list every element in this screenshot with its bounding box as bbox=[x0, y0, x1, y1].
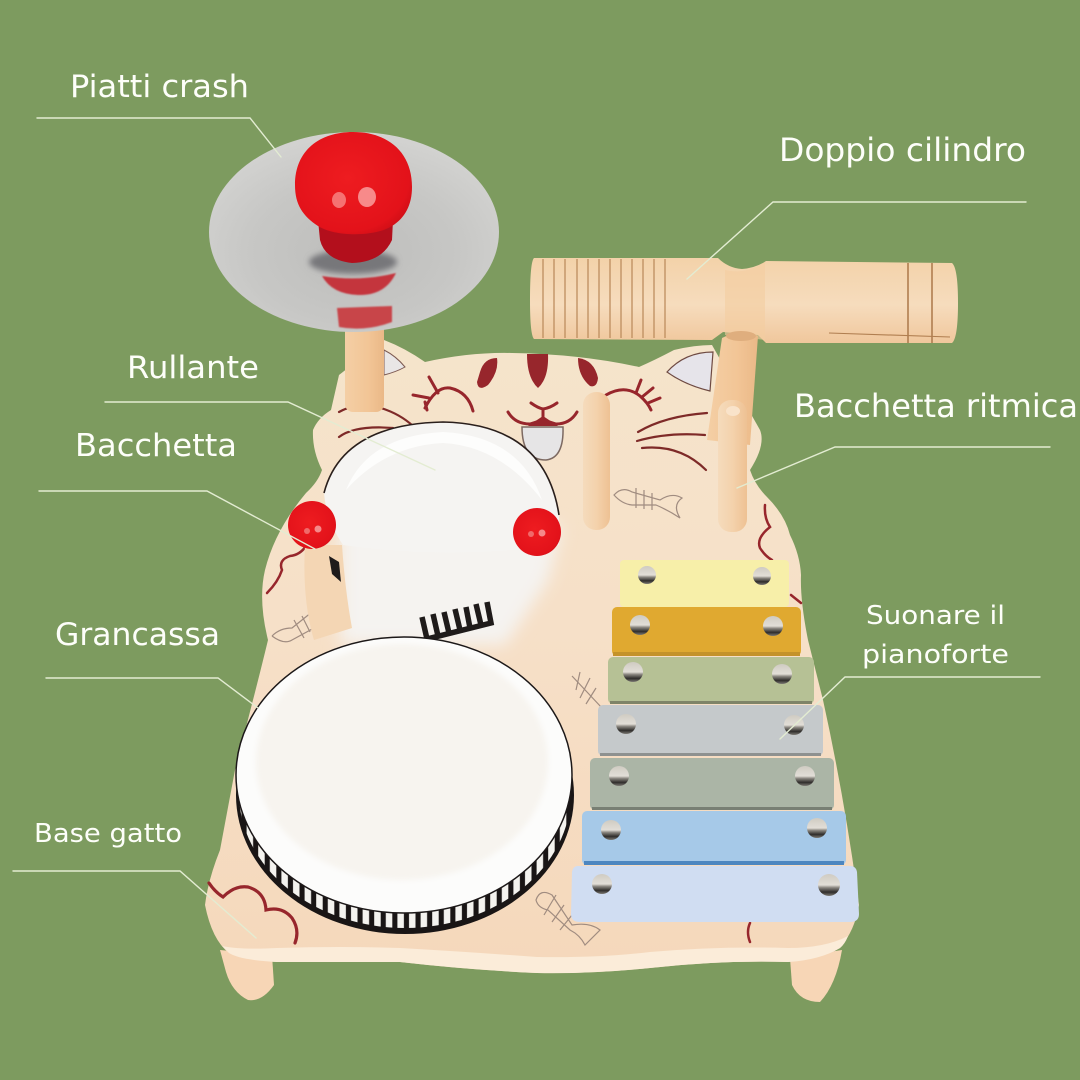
wooden pegs bbox=[583, 392, 747, 532]
line bacchetta bbox=[39, 491, 315, 549]
left stick ball bbox=[288, 501, 336, 549]
board silhouette bbox=[205, 340, 859, 973]
snare outline bbox=[324, 422, 559, 515]
board front edge bbox=[222, 936, 848, 973]
right paw curve bbox=[759, 505, 801, 603]
line suonare bbox=[780, 677, 1040, 739]
neck shading bbox=[725, 262, 765, 340]
drum rim slots bbox=[239, 658, 571, 928]
cylinder body bbox=[530, 258, 958, 343]
label: Suonare il pianoforte: Suonare il bbox=[866, 601, 1005, 631]
xylophone bbox=[571, 560, 859, 922]
label: Bacchetta: Bacchetta bbox=[75, 428, 237, 464]
drum head inner bbox=[256, 644, 548, 880]
line bacchetta ritmica bbox=[737, 447, 1050, 488]
lower left post bbox=[304, 545, 352, 640]
bar 3 sage bbox=[608, 657, 814, 704]
middle peg bbox=[583, 392, 610, 530]
knob stem bbox=[318, 220, 393, 263]
fish bone middle bbox=[572, 672, 602, 708]
cloud foot bbox=[209, 883, 297, 943]
label: Suonare il pianoforte: pianoforte bbox=[862, 640, 1009, 670]
left whiskers bbox=[339, 407, 413, 437]
bar 4 grey bbox=[598, 705, 823, 756]
mouth bbox=[508, 412, 577, 424]
label: Suonare il pianoforte bbox=[862, 601, 1009, 670]
bar 1 yellow bbox=[620, 560, 789, 607]
drum rim black bbox=[236, 656, 574, 934]
fish bone bottom bbox=[536, 892, 600, 945]
right stick ball bbox=[513, 508, 561, 556]
bar 6 blue bbox=[582, 811, 846, 865]
cymbal disc bbox=[209, 132, 499, 332]
fish bone upper bbox=[614, 488, 682, 518]
front right peg bbox=[718, 400, 747, 532]
comb mark bbox=[422, 602, 491, 639]
snare side shadow bbox=[329, 556, 341, 582]
snare lower part bbox=[340, 525, 562, 645]
red drum sticks heads bbox=[288, 501, 561, 556]
grooves bbox=[543, 259, 665, 338]
left ear inner bbox=[384, 350, 405, 375]
line piatti crash bbox=[37, 118, 281, 157]
right leg bbox=[790, 950, 842, 1002]
snare rim highlight bbox=[346, 432, 542, 500]
shadow bbox=[309, 250, 397, 274]
label: Piatti crash: Piatti crash bbox=[70, 69, 249, 105]
label: Rullante: Rullante bbox=[127, 350, 259, 386]
rullante snare drum bbox=[304, 422, 562, 645]
line doppio cilindro bbox=[687, 202, 1026, 279]
callout lines bbox=[13, 118, 1050, 938]
tongue bbox=[522, 427, 563, 460]
label: Doppio cilindro: Doppio cilindro bbox=[779, 131, 1026, 169]
peg hole bbox=[726, 331, 756, 341]
left paw curve bbox=[267, 546, 306, 593]
bar 5 grey green bbox=[590, 758, 834, 810]
fish bone doodles bbox=[272, 488, 682, 945]
bar 7 pale blue bbox=[571, 866, 859, 922]
reflection bbox=[322, 273, 396, 295]
drum head bbox=[236, 637, 572, 913]
base gatto wooden board bbox=[205, 340, 859, 1002]
cat face decoration bbox=[209, 350, 801, 943]
label: Base gatto: Base gatto bbox=[34, 819, 182, 849]
peg back bbox=[707, 332, 758, 445]
left eye bbox=[425, 388, 473, 411]
line rullante bbox=[105, 402, 435, 470]
label: Bacchetta ritmica: Bacchetta ritmica bbox=[794, 387, 1078, 425]
snare head bbox=[324, 422, 559, 552]
right whiskers bbox=[637, 413, 707, 470]
peg under cymbal bbox=[345, 320, 384, 412]
forehead stripes bbox=[477, 358, 497, 388]
fish bone left bbox=[272, 612, 314, 642]
piatti crash cymbal bbox=[209, 132, 499, 412]
knob highlights bbox=[332, 192, 346, 208]
left leg bbox=[220, 950, 274, 1000]
right eye bbox=[606, 390, 651, 410]
label: Grancassa: Grancassa bbox=[55, 617, 220, 653]
bottom mark bbox=[748, 923, 750, 942]
line base gatto bbox=[13, 871, 256, 938]
doppio cilindro bbox=[530, 258, 958, 445]
red knob bbox=[295, 132, 412, 234]
bar 2 mustard bbox=[612, 607, 801, 656]
line grancassa bbox=[46, 678, 258, 708]
grancassa bass drum bbox=[236, 637, 574, 934]
screws bbox=[592, 566, 840, 896]
right ear inner bbox=[667, 352, 713, 391]
